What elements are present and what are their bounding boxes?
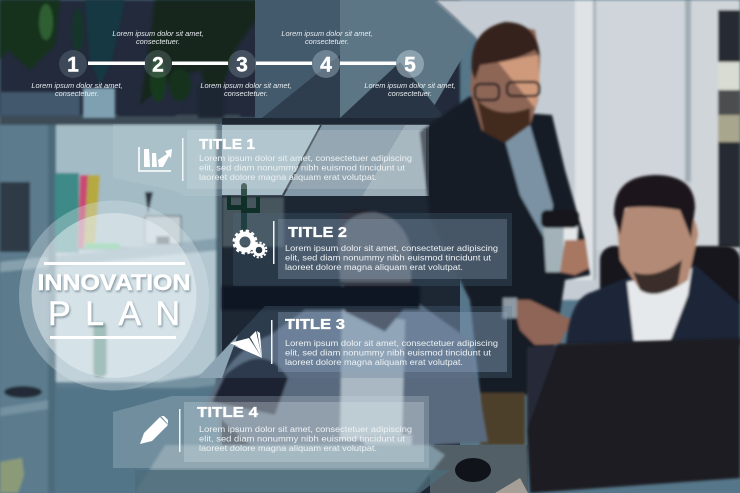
standing man (420, 22, 590, 445)
step 1: Lorem ipsum dolor sit amet, (31, 81, 123, 90)
glass box (145, 216, 181, 244)
text block: elit, sed diam nonummy nibh euismod tincidunt ut (199, 162, 406, 172)
panel: title 1 (113, 124, 429, 196)
text block: laoreet dolore magna aliquam erat volutpat. (285, 262, 463, 272)
text block: Lorem ipsum dolor sit amet, consectetuer adipiscing (285, 243, 498, 253)
panel: title 4 (113, 396, 429, 468)
text block: elit, sed diam nonummy nibh euismod tincidunt ut (285, 252, 492, 262)
text block: Lorem ipsum dolor sit amet, consectetuer adipiscing (199, 153, 412, 163)
heading: plan: PLAN (48, 295, 180, 333)
text block: laoreet dolore magna aliquam erat volutpat. (199, 443, 377, 453)
step 4: 4 (320, 54, 332, 76)
step 1 (31, 50, 123, 98)
shelves on the left (0, 0, 460, 493)
ring badge: innovation plan (19, 200, 209, 390)
plants at the top (0, 0, 270, 118)
step 2: Lorem ipsum dolor sit amet, (112, 29, 204, 38)
panel: title 2 (233, 213, 512, 286)
coffee cup (543, 222, 578, 272)
step 1: 1 (67, 54, 79, 76)
step 5 (364, 50, 456, 98)
seated man in the centre (205, 211, 488, 470)
text block: elit, sed diam nonummy nibh euismod tincidunt ut (285, 348, 492, 358)
heading: TITLE 1 (199, 136, 255, 153)
icon: gears (234, 231, 266, 257)
text block: Lorem ipsum dolor sit amet, consectetuer adipiscing (285, 338, 498, 348)
step 3 (200, 50, 292, 98)
heading: TITLE 2 (288, 224, 347, 241)
laptop (527, 338, 740, 493)
green vase (93, 322, 107, 377)
geometric overlay top centre (255, 0, 475, 130)
text block (199, 424, 412, 453)
step 2: consectetuer. (136, 37, 180, 46)
step 3: consectetuer. (224, 89, 268, 98)
desk (430, 445, 528, 493)
step 4 (281, 29, 373, 78)
text block: elit, sed diam nonummy nibh euismod tincidunt ut (199, 434, 406, 444)
text block: laoreet dolore magna aliquam erat volutpat. (285, 357, 463, 367)
step 5: consectetuer. (388, 89, 432, 98)
text block (285, 243, 498, 272)
seated man on the right (566, 175, 740, 345)
icon: pencil (140, 416, 168, 444)
step 4: consectetuer. (305, 37, 349, 46)
ring shape beside the badge (198, 335, 238, 378)
notebook on the desk (135, 445, 445, 493)
cactus niche (222, 197, 284, 247)
heading: TITLE 3 (285, 316, 345, 333)
step 2: 2 (152, 54, 164, 76)
panel: title 3 (197, 306, 512, 378)
step 3: Lorem ipsum dolor sit amet, (200, 81, 292, 90)
step 4: Lorem ipsum dolor sit amet, (281, 29, 373, 38)
text block: Lorem ipsum dolor sit amet, consectetuer adipiscing (199, 424, 412, 434)
text block: laoreet dolore magna aliquam erat volutpat. (199, 172, 377, 182)
icon: rising chart (139, 147, 172, 171)
step 3: 3 (236, 54, 248, 76)
step 1: consectetuer. (55, 89, 99, 98)
icon: paper plane (230, 331, 262, 358)
centre dark zone (222, 118, 460, 493)
numbered timeline (31, 29, 456, 98)
cactus (227, 183, 260, 233)
step 5: 5 (404, 54, 416, 76)
heading: innovation: INNOVATION (38, 270, 190, 295)
light wall on the right (435, 0, 740, 300)
books (0, 182, 30, 252)
computer mouse (455, 458, 491, 482)
text block (285, 338, 498, 367)
step 2 (112, 29, 204, 78)
text block (199, 153, 412, 182)
heading: TITLE 4 (197, 404, 259, 421)
step 5: Lorem ipsum dolor sit amet, (364, 81, 456, 90)
